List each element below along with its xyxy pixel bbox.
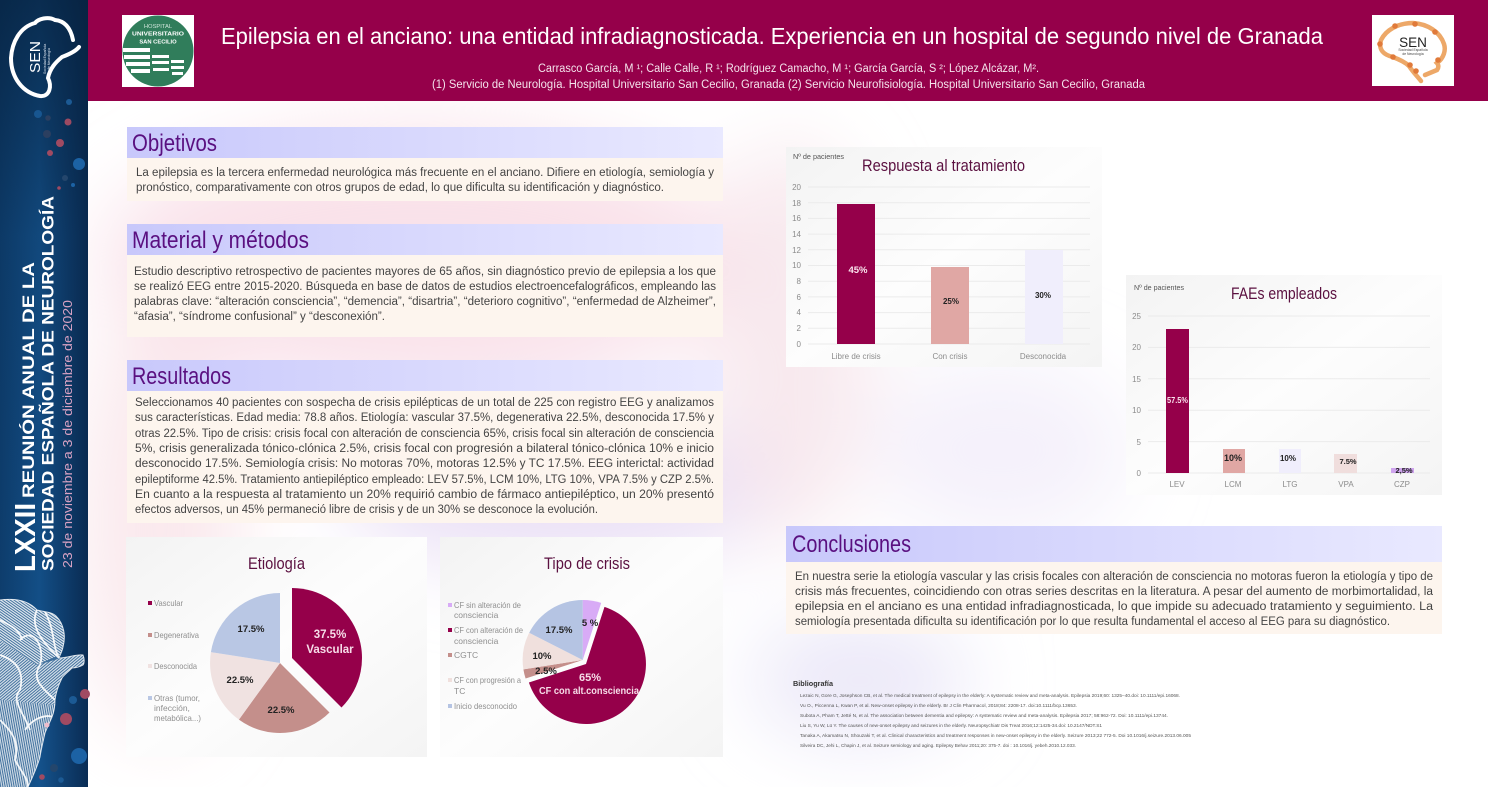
y axis labels: 8 xyxy=(797,277,802,286)
heading: resultados: Resultados xyxy=(132,363,231,390)
panel: resultados xyxy=(127,360,723,523)
affiliations: (1) Servicio de Neurología. Hospital Universitario San Cecilio, Granada (2) Servicio Neurofisiología. Hospital Universitario San Cecilio, Granada xyxy=(432,79,1146,91)
legend: tipo de crisis: CF con progresión a xyxy=(454,675,521,685)
legend: etiología: infección, xyxy=(154,703,190,713)
bibliography: Silveira DC, Jehi L, Chapin J, et al. Seizure semiology and aging. Epilepsy Behav 2011;20: 375-7. doi : 10.1016/j. yebeh.2010.12.033. xyxy=(800,743,1076,748)
legend: tipo de crisis: CF sin alteración de xyxy=(454,600,521,610)
pie: tipo de crisis: 17.5% xyxy=(546,625,573,636)
text: material y métodos: se realizó EEG entre 2015-2020. Búsqueda en base de datos de estudios electroencefalográficos, empleando las xyxy=(134,281,716,293)
legend: tipo de crisis: TC xyxy=(454,686,465,696)
bars: 57.5% xyxy=(1167,396,1188,405)
icon: brain illustration xyxy=(0,595,90,787)
pie: tipo de crisis: 65% xyxy=(579,672,601,684)
sidebar xyxy=(0,0,90,787)
text: resultados: efectos adversos, un 45% permaneció libre de crisis y de un 30% se desconoce la evolución. xyxy=(135,504,598,516)
text: material y métodos: palabras clave: “alteración consciencia”, “demencia”, “disartria”, “deterioro cognitivo”, “enfermedad de Alzheimer”, xyxy=(134,296,716,308)
text: resultados: En cuanto a la respuesta al tratamiento un 20% requirió cambio de fármaco antiepiléptico, un 20% presentó xyxy=(135,489,714,501)
pie: tipo de crisis xyxy=(523,600,646,724)
chart: tipo de crisis xyxy=(440,537,723,757)
y axis labels: 25 xyxy=(1132,312,1142,321)
pie: tipo de crisis: 5 % xyxy=(582,618,599,629)
axis title: Nº de pacientes xyxy=(1134,283,1184,292)
bars: 45% xyxy=(848,265,868,276)
pie: etiología: 22.5% xyxy=(268,705,295,716)
bars: 10% xyxy=(1224,453,1242,463)
legend: etiología: Vascular xyxy=(154,598,183,608)
legend: tipo de crisis: CF con alteración de xyxy=(454,625,523,635)
text: material y métodos: Estudio descriptivo retrospectivo de pacientes mayores de 65 años, sin diagnóstico previo de epilepsia a los que xyxy=(134,266,716,278)
y axis labels xyxy=(1132,312,1142,478)
legend: etiología: metabólica...) xyxy=(154,713,201,723)
heading: material y métodos: Material y métodos xyxy=(132,227,309,254)
x axis labels xyxy=(831,352,1067,361)
text: conclusiones xyxy=(795,571,1434,628)
text: objetivos xyxy=(136,167,714,194)
text: resultados: 5%, crisis generalizada tónico-clónica 2.5%, crisis focal con progresión a bilateral tónico-clónica 10% e inicio xyxy=(135,443,714,455)
legend: etiología: Degenerativa xyxy=(154,630,199,640)
bars: 25% xyxy=(943,297,959,306)
network dots top xyxy=(34,99,85,190)
network dots bottom xyxy=(39,689,90,783)
text: resultados: epileptiforme 42.5%. Tratamiento antiepiléptico empleado: LEV 57.5%, LCM 10%, LTG 10%, VPA 7.5% y CZP 2.5%. xyxy=(135,474,714,486)
x axis labels: Libre de crisis xyxy=(831,352,881,361)
sidebar event title: 23 de noviembre a 3 de diciembre de 2020 xyxy=(61,300,75,568)
y axis labels: 10 xyxy=(792,261,802,270)
panel: conclusiones xyxy=(786,526,1442,634)
icon: hospital logo: HOSPITAL xyxy=(144,24,173,30)
chart title: respuesta: Respuesta al tratamiento xyxy=(862,157,1025,175)
text: material y métodos: “afasia”, “síndrome confusional” y “desconexión”. xyxy=(134,311,385,323)
bibliography: Tanaka A, Akamatsu N, Shouzaki T, et al. Clinical characteristics and treatment responses in new-onset epilepsy in the elderly. Seizure 2013;22 772-5. Doi 10.1016/j.seizure.2013.06.005 xyxy=(800,733,1191,738)
chart: respuesta al tratamiento xyxy=(786,147,1102,367)
y axis labels: 0 xyxy=(1137,469,1142,478)
bibliography: Vu O., Piccenna L, Kwan P, et al. New-onset epilepsy in the elderly. Br J Clin Pharmacol, 2018;84: 2208-17. doi:10.1111/bcp.13653. xyxy=(800,703,1077,708)
pie: tipo de crisis: 10% xyxy=(532,651,552,662)
sidebar event title: REUNIÓN ANUAL DE LA xyxy=(19,262,38,498)
y axis labels: 10 xyxy=(1132,406,1142,415)
pie: tipo de crisis: CF con alt.consciencia xyxy=(539,685,639,697)
y axis labels: 15 xyxy=(1132,375,1142,384)
bibliography: Lezaic N, Gore G, Josephson CB, et al. The medical treatment of epilepsy in the elderly: A systematic review and meta-analysis. Epilepsia 2019;60: 1325–40.doi: 10.1111/epi.16068. xyxy=(800,693,1180,698)
icon: SEN brain logo: Sociedad Española xyxy=(43,44,47,74)
sidebar event title xyxy=(10,196,75,572)
panel: objetivos xyxy=(127,127,723,201)
icon: SEN logo: SEN xyxy=(1399,35,1427,50)
icon: SEN logo xyxy=(1372,15,1454,86)
y axis labels: 5 xyxy=(1137,438,1142,447)
sidebar event title: SOCIEDAD ESPAÑOLA DE NEUROLOGÍA xyxy=(38,196,58,571)
heading: objetivos: Objetivos xyxy=(132,130,217,157)
legend: tipo de crisis: consciencia xyxy=(454,610,499,620)
text: objetivos: pronóstico, comparativamente con otros grupos de edad, lo que dificulta su identificación y diagnóstico. xyxy=(136,182,664,194)
icon: SEN brain logo: de Neurología xyxy=(47,48,51,70)
bars: 7.5% xyxy=(1339,457,1357,466)
y axis labels: 0 xyxy=(797,340,802,349)
text: resultados: Seleccionamos 40 pacientes con sospecha de crisis epilépticas de un total de 225 con registro EEG y analizamos xyxy=(135,397,714,409)
legend: etiología: Otras (tumor, xyxy=(154,693,200,703)
x axis labels: LTG xyxy=(1283,480,1297,489)
y axis labels: 18 xyxy=(792,199,802,208)
text: objetivos: La epilepsia es la tercera enfermedad neurológica más frecuente en el anciano. Difiere en etiología, semiología y xyxy=(136,167,714,179)
y axis labels: 2 xyxy=(797,324,802,333)
bibliography: Subota A, Pham T, Jetté N, et al. The association between dementia and epilepsy: A systematic review and meta-analysis. Epilepsia 2017; 58:962-72. Doi: 10.1111/epi.13744. xyxy=(800,713,1168,718)
text: resultados: sus características. Edad media: 78.8 años. Etiología: vascular 37.5%, degenerativa 22.5%, desconocida 17.5% y xyxy=(135,412,714,424)
text: resultados: otras 22.5%. Tipo de crisis: crisis focal con alteración de consciencia 65%, crisis focal sin alteración de consciencia xyxy=(135,428,715,440)
pie: etiología xyxy=(210,588,362,733)
icon: SEN brain logo: SEN xyxy=(28,41,44,73)
pie: etiología: 17.5% xyxy=(238,624,265,635)
pie: etiología: 22.5% xyxy=(227,675,254,686)
title: Epilepsia en el anciano: una entidad infradiagnosticada. Experiencia en un hospital de segundo nivel de Granada xyxy=(221,23,1323,49)
y axis labels: 20 xyxy=(792,183,802,192)
icon: hospital logo xyxy=(122,15,194,87)
icon: SEN brain logo xyxy=(11,18,79,96)
pie: etiología: Vascular xyxy=(306,644,354,656)
chart title: etiología: Etiología xyxy=(248,555,306,573)
legend: tipo de crisis xyxy=(448,600,523,711)
heading: conclusiones: Conclusiones xyxy=(792,531,911,558)
pie: etiología: 37.5% xyxy=(314,629,346,641)
text: conclusiones: semiología presentada dificulta su identificación por lo que resulta fundamental el acceso al EEG para su diagnóstico. xyxy=(795,616,1390,628)
text: conclusiones: En nuestra serie la etiología vascular y las crisis focales con alteración de consciencia no motoras fueron la etiología y tipo de xyxy=(795,571,1433,583)
bars xyxy=(837,204,1063,344)
y axis labels: 20 xyxy=(1132,343,1142,352)
icon: hospital logo: UNIVERSITARIO xyxy=(132,32,185,38)
icon: SEN logo: Sociedad Española xyxy=(1398,48,1428,52)
y axis labels xyxy=(792,183,802,349)
y axis labels: 14 xyxy=(792,230,802,239)
bibliography: Bibliografía xyxy=(793,679,834,688)
header band xyxy=(88,0,1488,101)
text: conclusiones: epilepsia en el anciano es una entidad infradiagnosticada, lo que impide su adecuado tratamiento y seguimiento. La xyxy=(795,601,1434,613)
bibliography: Liu S, Yu W, Lü Y. The causes of new-onset epilepsy and seizures in the elderly. Neuropsychiatr Dis Treat 2016;12:1425-34.doi: 10.2147/NDT.S1 xyxy=(800,723,1102,728)
legend: tipo de crisis: CGTC xyxy=(454,650,478,660)
x axis labels: VPA xyxy=(1338,480,1354,489)
x axis labels xyxy=(1169,480,1410,489)
legend: tipo de crisis: Inicio desconocido xyxy=(454,701,517,711)
chart: etiología xyxy=(126,537,427,757)
text: conclusiones: crisis más frecuentes, coincidiendo con otras series descritas en la literatura. A pesar del aumento de morbimortalidad, la xyxy=(795,586,1434,598)
authors: Carrasco García, M ¹; Calle Calle, R ¹; Rodríguez Camacho, M ¹; García García, S ²; López Alcázar, M². xyxy=(538,63,1039,75)
bars: 10% xyxy=(1280,454,1296,463)
bars xyxy=(1166,329,1414,475)
legend: etiología xyxy=(148,598,201,723)
x axis labels: LCM xyxy=(1225,480,1242,489)
text: resultados xyxy=(135,397,715,516)
axis title: Nº de pacientes xyxy=(793,152,844,161)
x axis labels: CZP xyxy=(1394,480,1410,489)
bibliography xyxy=(793,679,1191,748)
panel: material y métodos xyxy=(127,224,723,337)
bars: 30% xyxy=(1035,291,1051,300)
pie: tipo de crisis: 2.5% xyxy=(535,666,557,677)
legend: etiología: Desconocida xyxy=(154,661,197,671)
text: material y métodos xyxy=(134,266,716,323)
x axis labels: LEV xyxy=(1169,480,1185,489)
x axis labels: Desconocida xyxy=(1020,352,1067,361)
text: resultados: desconocido 17.5%. Semiología crisis: No motoras 70%, motoras 12.5% y TC 17.5%. EEG interictal: actividad xyxy=(135,458,714,470)
sidebar event title: LXXII xyxy=(10,503,42,572)
y axis labels: 6 xyxy=(797,293,802,302)
legend: tipo de crisis: consciencia xyxy=(454,636,499,646)
y axis labels: 12 xyxy=(792,246,802,255)
chart title: tipo de crisis: Tipo de crisis xyxy=(544,555,630,573)
icon: hospital logo: SAN CECILIO xyxy=(139,40,177,46)
icon: SEN logo: de Neurología xyxy=(1402,52,1424,56)
y axis labels: 16 xyxy=(792,214,802,223)
y axis labels: 4 xyxy=(797,308,802,317)
x axis labels: Con crisis xyxy=(932,352,968,361)
chart title: FAEs: FAEs empleados xyxy=(1231,285,1337,303)
bars: 2,5% xyxy=(1395,466,1413,475)
chart: FAEs empleados xyxy=(1126,275,1442,495)
